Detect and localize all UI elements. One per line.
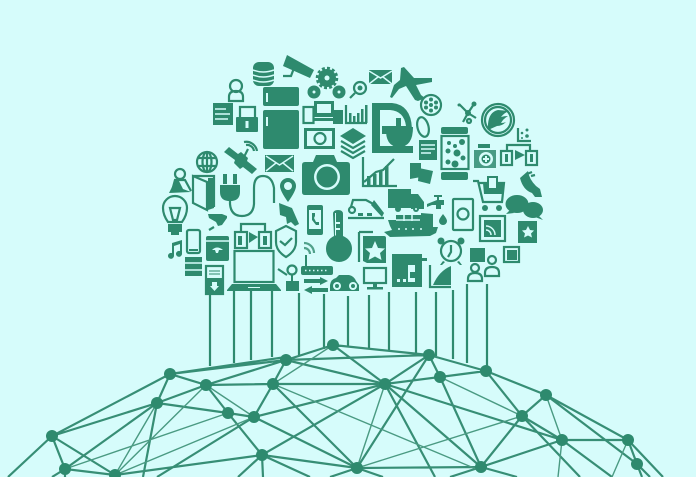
icon: envelope: [265, 155, 294, 172]
icon: media flow small: [235, 224, 271, 248]
icon: shopping cart: [473, 176, 504, 211]
icon: people: [468, 256, 499, 281]
icon: security camera: [283, 55, 314, 78]
icon: database: [253, 62, 274, 86]
icon: tablet: [453, 199, 473, 230]
icon: mobile phone: [307, 205, 323, 235]
icon: chip square: [504, 247, 519, 262]
icon: gears: [308, 68, 346, 98]
icon: circuit module: [474, 144, 496, 168]
icon: documents: [410, 163, 433, 184]
icon: smartphone outline: [187, 230, 200, 253]
icon: photo camera: [302, 155, 350, 195]
icon: alarm clock: [438, 238, 464, 265]
icon: connected screens: [304, 101, 343, 124]
icon: delivery truck: [388, 189, 424, 212]
icon: coffee machine: [392, 254, 427, 287]
icon: scatter plot: [518, 128, 531, 141]
icon: star document: [518, 221, 537, 243]
icon: server: [185, 257, 202, 276]
globe nodes: [46, 339, 643, 477]
icon: cargo ship: [384, 213, 438, 237]
icon: map pin: [169, 169, 191, 193]
icon: laptop: [227, 251, 281, 291]
icon: stacked layers: [340, 128, 366, 158]
icon: rocket: [279, 203, 299, 226]
icon: satellite: [224, 142, 257, 174]
icon: water tap: [427, 195, 447, 225]
icon: music note: [168, 240, 182, 259]
icon: web camera: [278, 266, 299, 291]
icon: padlock: [236, 107, 258, 132]
globe mesh lines: [8, 345, 663, 477]
icon: app window: [206, 236, 229, 261]
icon: two-way arrows: [304, 277, 328, 294]
icon: airplane: [390, 67, 432, 101]
icon: wifi router: [301, 243, 333, 275]
globe mesh thin lines: [65, 345, 628, 477]
icon: drone sensor: [208, 214, 227, 230]
icon: refrigerator: [263, 87, 299, 149]
icon: sphere badge: [482, 104, 514, 136]
connector lines from cloud to globe: [210, 284, 487, 368]
icon: car: [330, 275, 359, 291]
icon: photo box: [304, 128, 335, 149]
icon: flower badge: [421, 95, 441, 115]
icon: desktop monitor: [364, 268, 386, 290]
icon: document with arrow: [206, 266, 223, 294]
icon: satellite dish: [520, 171, 542, 197]
icon: ring: [415, 116, 431, 138]
icon: server list: [213, 103, 233, 125]
icon: network nodes: [458, 102, 476, 123]
icon: location pin: [280, 178, 296, 202]
wireframe network globe: [8, 339, 663, 477]
icon: light bulb: [163, 196, 187, 235]
cloud of connected device icons: [163, 55, 543, 294]
icon: star folder: [359, 232, 386, 263]
icon: chat bubbles: [506, 195, 543, 220]
icon: growth chart: [363, 157, 397, 186]
icon: media flow: [501, 145, 537, 165]
icon: document: [419, 140, 437, 160]
icon: stand mixer: [372, 103, 413, 153]
icon: magnifier: [350, 82, 366, 98]
icon: chat square: [470, 248, 485, 262]
icon: bar chart: [346, 105, 368, 123]
icon: wireless square: [480, 216, 505, 241]
icon: shield with check: [276, 226, 296, 257]
icon: area chart: [430, 265, 451, 287]
icon: small envelope: [369, 70, 392, 84]
icon: smart watch: [441, 127, 468, 180]
icon: thermometer: [326, 210, 352, 262]
icon: user: [229, 80, 243, 101]
icon: plug with cable: [220, 174, 274, 216]
icon: open door: [193, 176, 214, 210]
icon: globe: [197, 152, 217, 172]
icon: robot arm: [348, 200, 384, 218]
